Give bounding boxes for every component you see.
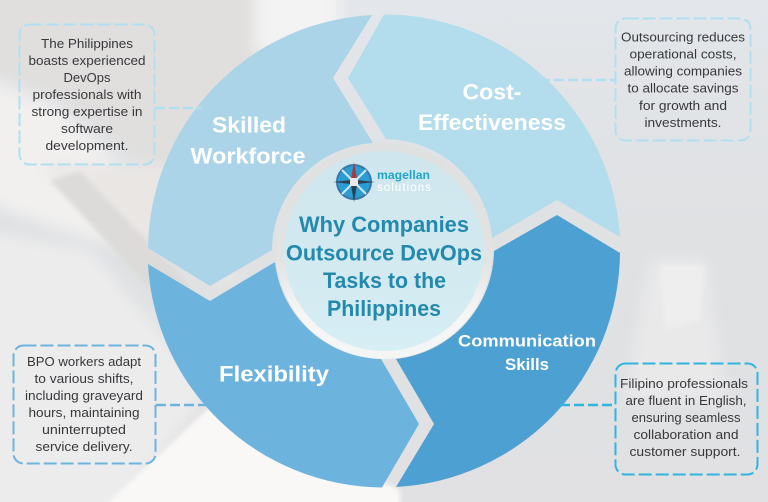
callout: Communication Skills xyxy=(560,364,758,474)
heading: Cost-Effectiveness: Cost- xyxy=(462,80,522,104)
callout: Communication Skills: Filipino professionals xyxy=(620,376,749,391)
icon: compass xyxy=(333,162,375,202)
title: Tasks to the xyxy=(323,268,446,293)
segment: Skilled Workforce xyxy=(148,15,373,286)
logo text: magellan xyxy=(377,170,430,182)
heading: Flexibility: Flexibility xyxy=(219,362,330,386)
callout: Cost-Effectiveness: Outsourcing reduces xyxy=(621,30,746,44)
callout: Communication Skills: collaboration and xyxy=(634,427,738,442)
heading: Cost-Effectiveness xyxy=(418,80,566,135)
callout: Cost-Effectiveness: for growth and xyxy=(639,98,727,113)
callout: Cost-Effectiveness: operational costs, xyxy=(630,46,736,62)
callout: Skilled Workforce: software xyxy=(61,121,113,136)
heading: Skilled Workforce xyxy=(190,112,306,168)
center ring xyxy=(280,147,488,355)
callout: Cost-Effectiveness: allowing companies xyxy=(624,64,743,78)
title: Philippines xyxy=(327,296,441,321)
callout: Flexibility: including graveyard xyxy=(25,388,143,403)
heading: Communication Skills: Skills xyxy=(505,355,549,374)
callout: Flexibility: uninterrupted xyxy=(42,422,126,437)
callout: Skilled Workforce: development. xyxy=(46,138,128,153)
segment: Flexibility xyxy=(148,262,419,488)
segment: Cost-Effectiveness xyxy=(348,14,620,238)
callout: Skilled Workforce: strong expertise in xyxy=(32,104,142,119)
logo text xyxy=(377,170,431,194)
callout: Skilled Workforce xyxy=(20,24,202,164)
heading: Skilled Workforce: Workforce xyxy=(190,144,306,168)
callout: Flexibility: service delivery. xyxy=(36,439,132,454)
title xyxy=(286,212,482,321)
segment: Communication Skills xyxy=(396,215,620,487)
callout: Communication Skills: ensuring seamless xyxy=(632,410,741,425)
logo xyxy=(333,162,431,202)
logo text: solutions xyxy=(377,182,431,194)
heading: Communication Skills xyxy=(458,332,596,374)
callout: Cost-Effectiveness: investments. xyxy=(644,115,722,130)
callout: Skilled Workforce: boasts experienced xyxy=(28,53,146,68)
callout: Flexibility: to various shifts, xyxy=(34,371,134,386)
callout: Flexibility: hours, maintaining xyxy=(28,405,140,420)
heading: Cost-Effectiveness: Effectiveness xyxy=(418,110,566,135)
callout: Skilled Workforce: professionals with xyxy=(32,87,142,102)
title: Why Companies xyxy=(299,212,469,237)
callout: Flexibility xyxy=(14,346,207,464)
callout: Communication Skills: customer support. xyxy=(630,444,740,459)
callout: Skilled Workforce: The Philippines xyxy=(41,36,134,51)
title: Outsource DevOps xyxy=(286,240,482,266)
callout: Skilled Workforce: DevOps xyxy=(64,70,111,85)
heading: Communication Skills: Communication xyxy=(458,332,596,350)
callout: Flexibility: BPO workers adapt xyxy=(27,354,141,369)
callout: Cost-Effectiveness xyxy=(540,18,750,140)
callout: Communication Skills: are fluent in English, xyxy=(626,393,746,408)
heading: Skilled Workforce: Skilled xyxy=(212,112,286,138)
callout: Cost-Effectiveness: to allocate savings xyxy=(628,80,739,96)
